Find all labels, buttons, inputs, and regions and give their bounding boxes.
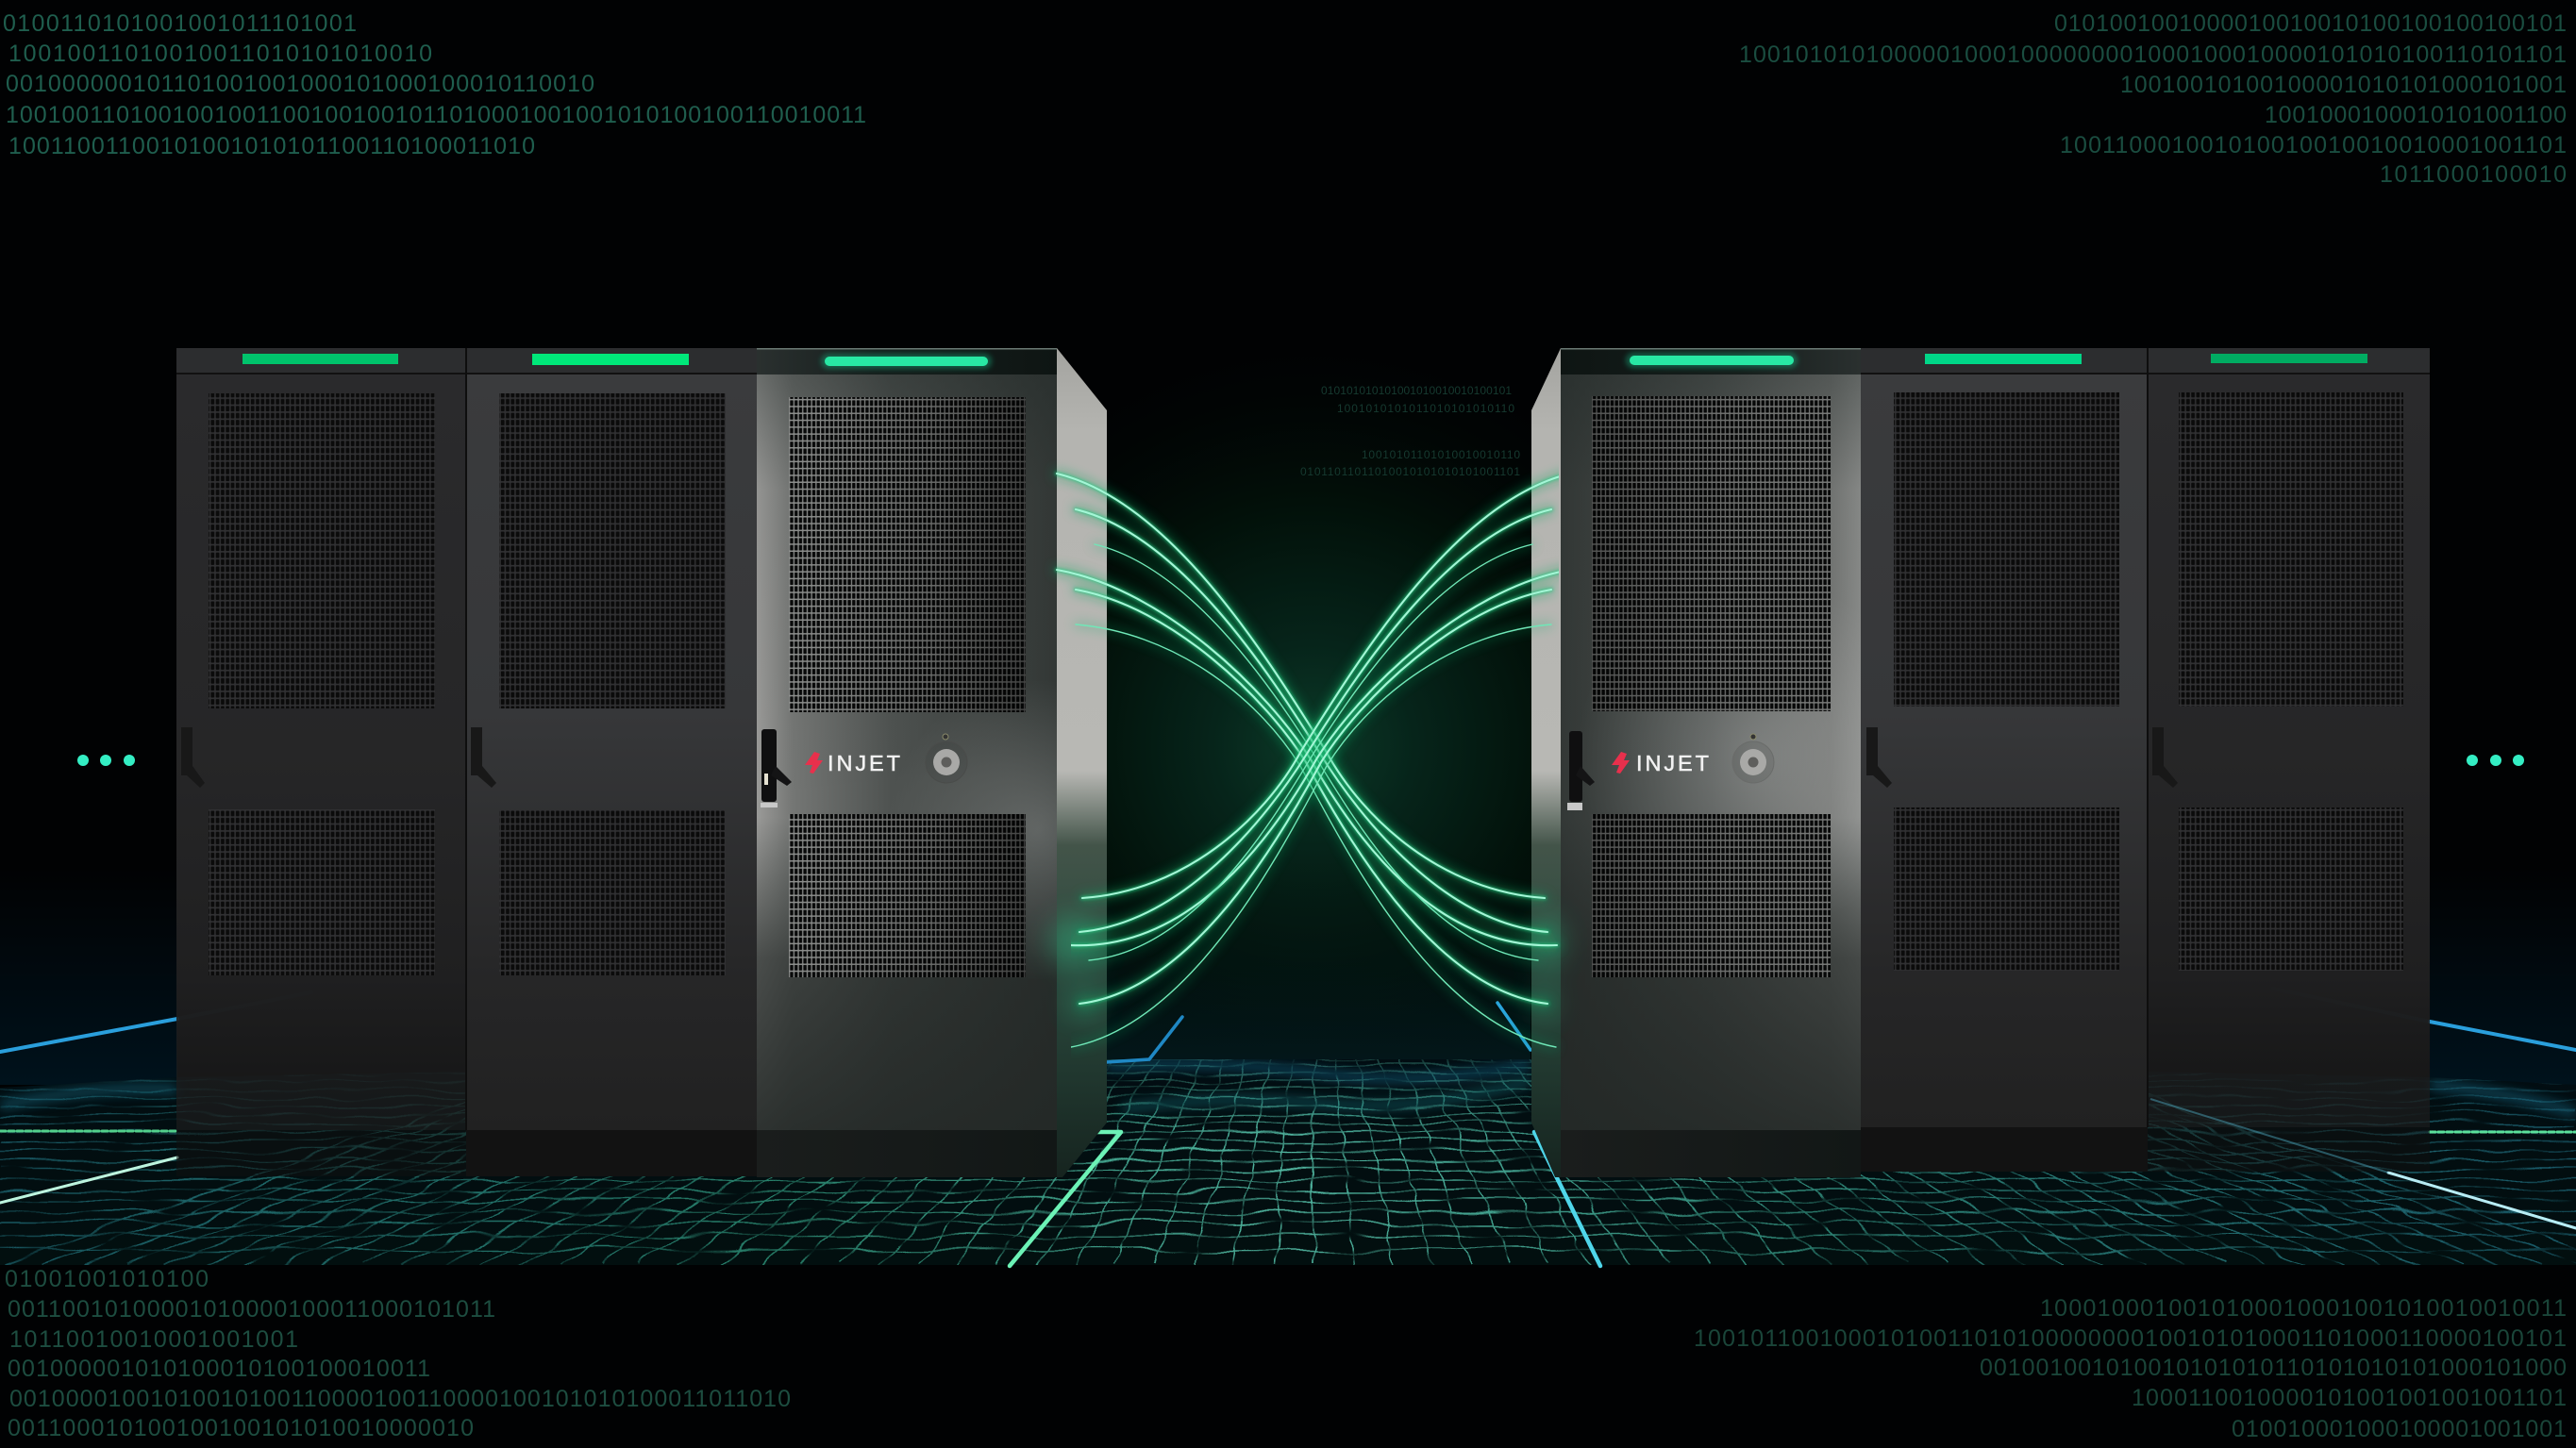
binary code block: bottom right: 1000100010010100010001001010010010011 <box>2040 1295 2567 1322</box>
binary code block: bottom left: 10110010010001001001 <box>9 1326 298 1353</box>
binary code block: bottom left: 001100010100100100101010010000010 <box>8 1415 474 1441</box>
binary code block: bottom left: 00100001001010010100110000100110000100101010100011011010 <box>9 1386 791 1412</box>
vent grille upper <box>1592 396 1831 711</box>
binary code block: top right: 100110001001010010010010010001001101 <box>2060 132 2567 158</box>
vent grille upper <box>1894 392 2119 707</box>
binary code block: top right: 1001000100010101001100 <box>2265 102 2567 128</box>
binary code block: bottom right: 1000110010000101001001001001101 <box>2132 1385 2567 1411</box>
binary code block: bottom left <box>5 1266 791 1441</box>
side panel glows <box>1047 917 1563 1017</box>
side panel <box>1531 348 1561 1177</box>
strands: left top to right bottom <box>1057 474 1557 1047</box>
status light bar <box>243 354 398 364</box>
dial <box>1732 734 1774 783</box>
door handle <box>181 727 205 788</box>
status light bar <box>1925 354 2082 364</box>
status light bar <box>821 354 992 369</box>
binary code block: bottom right: 010010001000100001001001 <box>2232 1416 2567 1442</box>
binary code block: bottom right: 001001001010010101010110101010101000101000 <box>1980 1355 2567 1381</box>
vent grille lower <box>499 809 726 975</box>
binary code block: top right: 10010101010000010001000000001000100010000101010100110101101 <box>1739 42 2567 68</box>
binary code block: top right <box>1739 10 2567 188</box>
door handle <box>761 729 792 807</box>
vent grille lower <box>1592 814 1831 977</box>
status light bar <box>1626 353 1798 368</box>
binary code block: bottom left: 01001001010100 <box>5 1266 209 1292</box>
INJET logo: INJET <box>1636 751 1709 775</box>
binary code block: centre <box>1300 384 1520 478</box>
binary code block: bottom right: 10010110010001010011010100000000100101010001101000110000100101 <box>1694 1325 2567 1352</box>
three dots: right <box>2467 755 2524 766</box>
binary code block: top left <box>3 10 866 159</box>
INJET logo: INJET <box>828 751 900 775</box>
binary code block: centre: 010101010101001010010010100101 <box>1321 384 1512 397</box>
binary code block: bottom left: 001000001010100010100100010011 <box>8 1356 430 1382</box>
strands: right top to left bottom <box>1070 474 1570 1047</box>
cabinet 2 (left, middle) <box>465 348 757 1176</box>
binary code block: top left: 0100110101001001011101001 <box>3 10 357 37</box>
binary code block: top right: 10010010100100001010101000101001 <box>2120 72 2567 98</box>
binary code block: top left: 10011001100101001010101100110100011010 <box>8 133 535 159</box>
cabinet 3 (left, front, lit) <box>757 348 1107 1177</box>
binary code block: top right: 0101001001000010010010100100100100101 <box>2054 10 2567 37</box>
cabinet 1 (left, far, translucent base) <box>176 348 466 1176</box>
door handle <box>1567 731 1595 810</box>
vent grille lower <box>209 809 435 975</box>
cabinet 1 mirrored (right, far, translucent base) <box>2148 348 2430 1173</box>
vent grille upper <box>209 393 435 708</box>
three dots: left <box>77 755 135 766</box>
floor light lines <box>0 989 2576 1266</box>
binary code block: bottom right <box>1694 1295 2567 1442</box>
binary code block: top right: 1011000100010 <box>2380 161 2567 188</box>
binary code block: centre: 1001010101011010101010110 <box>1337 402 1514 415</box>
vent grille upper <box>2179 392 2403 707</box>
door handle <box>2152 727 2178 788</box>
binary code block: centre: 10010101101010010010110 <box>1362 448 1520 461</box>
binary code block: top left: 001000000101101001001000101000100010110010 <box>6 71 594 97</box>
side panel <box>1057 348 1107 1177</box>
dial <box>926 734 967 783</box>
status light bar <box>2211 354 2367 363</box>
status light bar <box>532 354 689 365</box>
cabinet 3 mirrored (right, front, lit) <box>1531 348 1861 1177</box>
vent grille lower <box>2179 807 2403 971</box>
binary code block: bottom left: 00110010100001010000100011000101011 <box>8 1296 495 1323</box>
door handle <box>1866 727 1892 788</box>
door handle <box>471 727 496 788</box>
vent grille upper <box>499 393 726 708</box>
binary code block: top left: 10010011010010011010101010010 <box>8 41 432 67</box>
binary code block: centre: 01011011011010010101010101001101 <box>1300 465 1520 478</box>
vent grille upper <box>789 397 1026 712</box>
cabinet 2 mirrored (right, middle) <box>1861 348 2149 1172</box>
floor grid <box>0 1059 2576 1265</box>
vent grille lower <box>1894 807 2119 971</box>
crossing light strands <box>1057 474 1570 1047</box>
binary code block: top left: 10010011010010010011001001001011010001001001010100100110010011 <box>6 102 866 128</box>
vent grille lower <box>789 814 1026 977</box>
